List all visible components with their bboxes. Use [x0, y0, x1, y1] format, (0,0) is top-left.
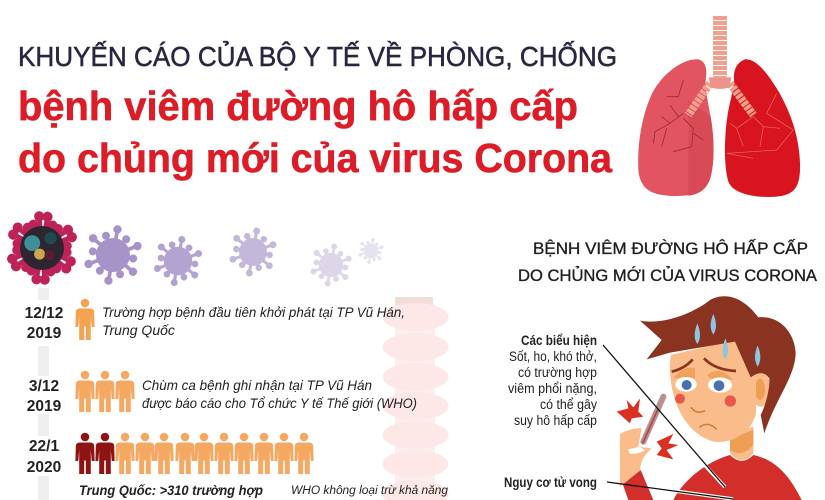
mortality risk label: Nguy cơ tử vong — [504, 475, 597, 490]
icon: person — [75, 299, 95, 340]
right heading: DO CHỦNG MỚI CỦA VIRUS CORONA — [518, 266, 818, 285]
pain marks — [617, 398, 643, 423]
ear — [751, 372, 771, 407]
eye shadows — [673, 368, 733, 380]
nose and mouth — [691, 407, 717, 429]
leader lines — [603, 345, 733, 499]
WHO note: WHO không loại trừ khả năng — [291, 485, 449, 497]
date: 2020 — [27, 459, 61, 476]
sweat drops — [695, 314, 760, 367]
symptoms callout: Các biểu hiện — [521, 333, 597, 348]
description: Trung Quốc — [102, 322, 175, 338]
title — [18, 40, 617, 181]
case count: Trung Quốc: >310 trường hợp — [79, 482, 263, 498]
shirt — [673, 455, 802, 500]
date: 2019 — [27, 398, 62, 415]
viruses — [6, 211, 384, 287]
trachea — [699, 16, 741, 77]
pink segmented column — [382, 297, 448, 500]
symptoms callout: có trường hợp — [518, 365, 597, 380]
description: Trường hợp bệnh đầu tiên khởi phát tại TP Vũ Hán, — [102, 304, 405, 320]
hair — [640, 296, 796, 433]
timeline row 2 — [27, 371, 417, 415]
symptoms callout: viêm phổi nặng, — [508, 381, 597, 396]
icons: twelve people — [75, 433, 314, 474]
neck — [730, 427, 753, 460]
title line 2: bệnh viêm đường hô hấp cấp — [18, 83, 578, 129]
thermometer — [643, 397, 663, 442]
date: 12/12 — [25, 305, 63, 322]
icon: lungs — [638, 16, 800, 197]
icons: three people — [75, 371, 135, 412]
title line 1: KHUYẾN CÁO CỦA BỘ Y TẾ VỀ PHÒNG, CHỐNG — [18, 40, 617, 72]
date: 2019 — [27, 325, 62, 342]
right bronchial tree — [727, 93, 793, 158]
bronchi — [688, 83, 753, 115]
timeline axis — [38, 288, 49, 500]
symptoms callout: Sốt, ho, khó thở, — [509, 349, 597, 364]
icon: virus 2 — [83, 225, 143, 285]
left bronchial tree — [653, 80, 703, 152]
date: 22/1 — [29, 438, 59, 455]
symptoms callout: có thể gây — [540, 397, 597, 412]
left lung — [638, 59, 714, 196]
illustration: sick boy — [617, 296, 802, 500]
hand — [620, 428, 652, 487]
right heading — [518, 239, 818, 285]
right lung — [725, 59, 800, 197]
icon: virus 5 — [310, 243, 352, 287]
timeline row 3 — [27, 433, 449, 498]
icon: virus 6 — [358, 238, 384, 264]
title line 3: do chủng mới của virus Corona — [18, 135, 613, 181]
description: được báo cáo cho Tổ chức Y tế Thế giới (WHO) — [142, 395, 417, 411]
date: 3/12 — [29, 378, 59, 395]
sleeve — [623, 470, 653, 500]
right heading: BỆNH VIÊM ĐƯỜNG HÔ HẤP CẤP — [533, 239, 808, 258]
symptoms callout: suy hô hấp cấp — [514, 413, 597, 428]
eyes and brows — [672, 358, 736, 393]
face — [670, 340, 756, 442]
timeline row 1 — [25, 299, 405, 342]
icon: main virus — [6, 211, 78, 285]
icon: virus 4 — [229, 227, 277, 277]
cheeks — [675, 394, 685, 404]
icon: virus 3 — [153, 235, 203, 287]
description: Chùm ca bệnh ghi nhận tại TP Vũ Hán — [142, 377, 372, 393]
symptoms callout — [508, 333, 597, 428]
